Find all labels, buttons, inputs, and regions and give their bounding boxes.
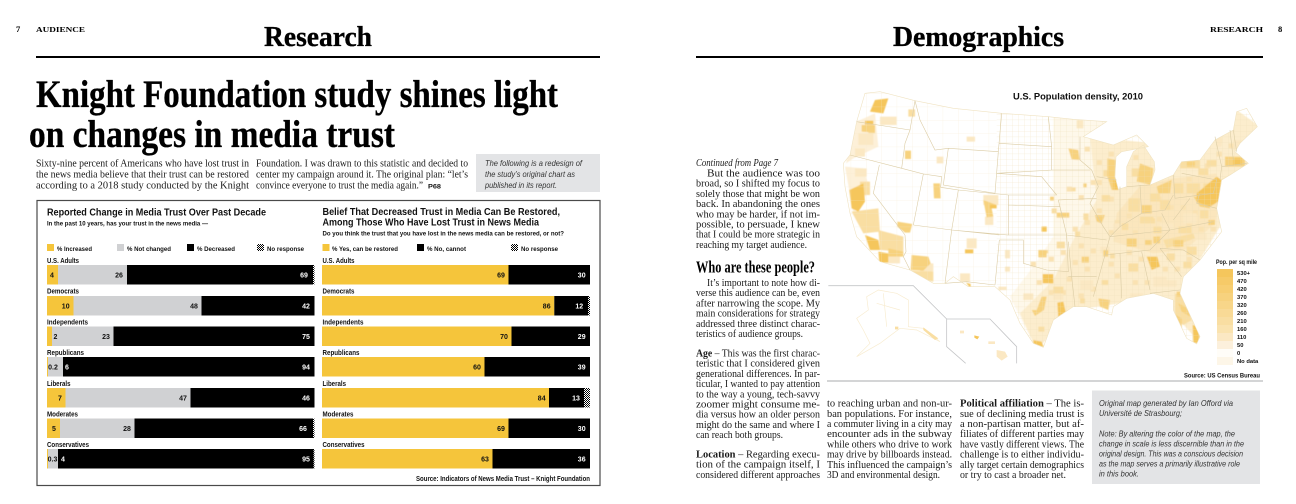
row: conservatives (47, 440, 314, 468)
map legend: 110 (1237, 335, 1246, 341)
article column one: that I could be more strategic in (696, 230, 820, 241)
section label: research: RESEARCH (1210, 25, 1263, 34)
row: liberals: Liberals (47, 379, 70, 388)
inset divider lines (828, 286, 1017, 363)
map legend: 160 (1237, 327, 1247, 333)
row: republicans: Republicans (322, 348, 360, 357)
map legend: 530+ (1237, 271, 1251, 277)
article column three: ally target certain demographics (960, 460, 1084, 471)
chart: reported change in media trust (47, 206, 314, 468)
intro text column two: Foundation. I was drawn to this statistic and decided to (256, 158, 468, 170)
map credit note box: Université de Strasbourg; (1099, 408, 1183, 418)
row: republicans (322, 348, 590, 376)
row: U.S. adults: 69 (497, 272, 505, 280)
row: U.S. adults: U.S. Adults (322, 256, 354, 265)
map credit note box: Original map generated by Ian Offord via (1099, 398, 1233, 408)
row: U.S. adults: 26 (115, 272, 123, 280)
row: democrats: 10 (62, 304, 70, 310)
article column two: ban populations. For instance, (827, 409, 952, 420)
map legend: 320 (1237, 303, 1247, 309)
row: moderates: 66 (299, 426, 307, 433)
panel: chart frame (37, 200, 600, 486)
article column one: Continued from Page 7 (696, 158, 779, 169)
state borders (843, 92, 1257, 347)
headline: on changes in media trust (29, 113, 395, 156)
article column one: considered different approaches (696, 470, 820, 481)
article column one: But the audience was too (707, 168, 820, 180)
medium counties (862, 125, 1245, 330)
row: independents (322, 318, 590, 346)
article column one: main considerations for strategy (696, 309, 821, 320)
mid-tone counties (852, 109, 1217, 332)
map credit note box: as the map serves a primarily illustrative role (1099, 458, 1240, 468)
section label: audience: AUDIENCE (36, 25, 85, 34)
article column one: tion of the campaign itself, I (696, 460, 821, 471)
article column two: to reaching urban and non-ur- (827, 399, 953, 410)
article column two (827, 399, 953, 481)
article column two: 3D and environmental design. (827, 470, 940, 481)
row: republicans: Republicans (47, 348, 84, 357)
legend left: % Increased (57, 246, 92, 253)
row: liberals: 46 (302, 396, 310, 402)
article column three: or try to cast a broader net. (960, 470, 1066, 481)
intro text column two: convince everyone to trust the media again.” (256, 180, 423, 192)
inset: Hawaii (960, 331, 1008, 361)
article column one: reaching my target audience. (696, 240, 807, 251)
legend title: Pop. per sq mile (1216, 259, 1257, 266)
article column two: a commuter living in a city may (827, 419, 953, 430)
subheading: who are these people: Who are these people? (696, 258, 815, 276)
intro text column two (256, 158, 468, 192)
article column one: teristic that I considered given (696, 359, 820, 370)
row: moderates (322, 410, 590, 438)
map legend: 260 (1237, 311, 1247, 317)
row: conservatives: 0.3 (48, 456, 57, 464)
row: independents: 29 (578, 334, 586, 341)
page number 7: 7 (16, 24, 21, 34)
map source: Source: US Census Bureau (1184, 372, 1260, 380)
chart source: Source: Indicators of News Media Trust – Knight Foundation (416, 476, 590, 483)
row: U.S. adults (322, 256, 590, 284)
row: conservatives: 4 (61, 456, 65, 464)
row: democrats: 86 (543, 304, 551, 310)
row: U.S. adults (47, 256, 314, 284)
article column three: sue of declining media trust is (960, 409, 1084, 420)
row: republicans: 6 (65, 364, 69, 372)
row: independents: 75 (302, 334, 310, 341)
note box (476, 154, 600, 192)
article column one: might do the same and where I (696, 420, 821, 431)
row: liberals: 13 (572, 396, 580, 402)
row: democrats: Democrats (322, 286, 354, 296)
legend left: No response (267, 246, 304, 253)
article column one: generational differences. In par- (696, 369, 821, 380)
row: independents: Independents (322, 318, 364, 326)
row: republicans: 60 (473, 364, 481, 372)
article column one: broad, so I shifted my focus to (696, 179, 820, 190)
legend right: No response (521, 246, 558, 253)
row: democrats: 48 (190, 304, 198, 310)
page heading: demographics: Demographics (893, 22, 1064, 53)
row: U.S. adults: 4 (50, 272, 54, 280)
light counties (855, 117, 1247, 322)
row: moderates: Moderates (322, 410, 354, 418)
row: democrats: Democrats (47, 286, 79, 296)
legend right: % No, cannot (427, 246, 467, 253)
article column one: possible, to persuade, I knew (696, 220, 821, 230)
article column one: back. In abandoning the ones (696, 199, 820, 210)
row: republicans: 39 (578, 364, 586, 372)
legend left: % Not changed (127, 246, 171, 253)
headline: Knight Foundation study shines light (36, 73, 558, 116)
row: independents: 23 (102, 334, 110, 341)
map legend: No data (1237, 359, 1259, 365)
row: moderates (47, 410, 314, 438)
row: U.S. adults: U.S. Adults (47, 256, 79, 265)
article column one: It’s important to note how di- (707, 278, 821, 289)
row: democrats: 42 (302, 304, 310, 310)
map credit note box: in this book. (1099, 468, 1139, 478)
article column one: solely those that might be won (696, 189, 820, 200)
legend right: % Yes, can be restored (332, 246, 398, 253)
article column three: challenge is to either individu- (960, 450, 1085, 461)
map credit note box (1092, 390, 1260, 484)
map legend: 210 (1237, 319, 1247, 325)
headline (29, 73, 558, 156)
map legend (1216, 259, 1259, 365)
row: independents (47, 318, 314, 346)
article column one: to the way a young, tech-savvy (696, 389, 821, 400)
article column two: encounter ads in the subway (827, 429, 953, 440)
map legend: 420 (1237, 287, 1247, 293)
note box: The following is a redesign of (485, 158, 583, 168)
article column one: zoomer might consume me- (696, 400, 821, 410)
map legend: 50 (1237, 343, 1243, 349)
article column three: have vastly different views. The (960, 439, 1084, 450)
row: republicans (47, 348, 314, 376)
row: moderates: 30 (578, 426, 586, 433)
chart title right (322, 206, 560, 228)
article column three: a non-partisan matter, but af- (960, 419, 1085, 430)
row: liberals (47, 379, 314, 408)
row: republicans: 0.2 (48, 364, 58, 372)
article column one: who may be harder, if not im- (696, 209, 821, 220)
article column three: Political affiliation – The is- (960, 399, 1085, 410)
intro text column two: center my campaign around it. The original plan: “let’s (256, 170, 468, 180)
article column one: Location – Regarding execu- (696, 450, 821, 460)
article column two: This influenced the campaign’s (827, 460, 952, 471)
article column one: after narrowing the scope. My (696, 298, 821, 309)
chart title right: Belief That Decreased Trust in Media Can Be Restored, (322, 206, 560, 218)
article column one (696, 158, 821, 481)
map credit note box: Note: By altering the color of the map, the (1099, 428, 1235, 438)
row: democrats: 12 (575, 304, 583, 310)
article column three (960, 399, 1085, 481)
row: independents: 70 (500, 334, 508, 341)
chart subtitle left: In the past 10 years, has your trust in the news media — (47, 220, 208, 228)
article column one: Age – This was the first charac- (696, 348, 821, 360)
article column one: dia versus how an older person (696, 410, 820, 421)
note box: the study’s original chart as (485, 169, 576, 179)
page number 8: 8 (1278, 24, 1282, 34)
intro text column one (36, 158, 249, 192)
article column one: can reach both groups. (696, 430, 783, 441)
row: independents: Independents (47, 318, 88, 326)
article column one: ticular, I wanted to pay attention (696, 379, 820, 390)
article column two: while others who drive to work (827, 439, 953, 450)
row: democrats (322, 286, 590, 316)
row: U.S. adults: 69 (300, 272, 308, 280)
article column one: addressed three distinct charac- (696, 319, 821, 330)
row: liberals: 7 (58, 396, 62, 402)
scattered pale counties (1031, 138, 1234, 298)
map legend: 0 (1237, 351, 1240, 357)
row: conservatives (322, 440, 590, 468)
intro text column one: Sixty-nine percent of Americans who have lost trust in (36, 158, 249, 170)
row: liberals: Liberals (322, 379, 346, 388)
page heading: research: Research (264, 22, 372, 53)
row: moderates: 69 (497, 426, 505, 433)
row: conservatives: 63 (481, 456, 489, 464)
row: conservatives: 95 (302, 456, 310, 464)
map legend: 470 (1237, 279, 1247, 285)
row: independents: 2 (54, 334, 58, 341)
row: republicans: 94 (302, 364, 310, 372)
legend left (47, 244, 304, 253)
chart: belief that trust can be restored (322, 206, 590, 483)
intro text column one: according to a 2018 study conducted by the Knight (36, 180, 249, 192)
chart title right: Among Those Who Have Lost Trust in News Media (322, 216, 539, 228)
row: liberals (322, 379, 590, 408)
inset: Alaska (857, 290, 940, 357)
chart title left: Reported Change in Media Trust Over Past Decade (47, 206, 266, 218)
dense counties (849, 98, 1242, 347)
article column three: filiates of different parties may (960, 429, 1085, 440)
chart subtitle right: Do you think the trust that you have lost in the news media can be restored, or not? (322, 230, 564, 238)
row: democrats (47, 286, 314, 316)
choropleth map of US population density (828, 91, 1258, 364)
row: moderates: 28 (123, 426, 131, 433)
intro text column one: the news media believe that their trust can be restored (36, 170, 249, 180)
row: liberals: 47 (179, 396, 187, 402)
row: conservatives: Conservatives (322, 440, 365, 449)
map credit note box: original design. This was a conscious decision (1099, 448, 1243, 458)
legend left: % Decreased (197, 246, 235, 253)
map title: U.S. Population density, 2010 (1013, 92, 1143, 102)
article column one: teristics of audience groups. (696, 329, 803, 340)
map legend: 370 (1237, 295, 1247, 301)
intro text column two: P68 (428, 184, 442, 190)
article column one: verse this audience can be, even (696, 288, 820, 299)
row: U.S. adults: 30 (578, 272, 586, 280)
legend right (322, 244, 558, 253)
row: moderates: Moderates (47, 410, 78, 418)
row: liberals: 84 (538, 396, 546, 402)
article column two: may drive by billboards instead. (827, 450, 952, 461)
row: conservatives: Conservatives (47, 440, 89, 449)
row: conservatives: 36 (578, 456, 586, 464)
map credit note box: change in scale is less discernible than in the (1099, 438, 1244, 448)
note box: published in its report. (484, 180, 557, 190)
county grid (997, 113, 1263, 353)
row: moderates: 5 (52, 426, 56, 433)
